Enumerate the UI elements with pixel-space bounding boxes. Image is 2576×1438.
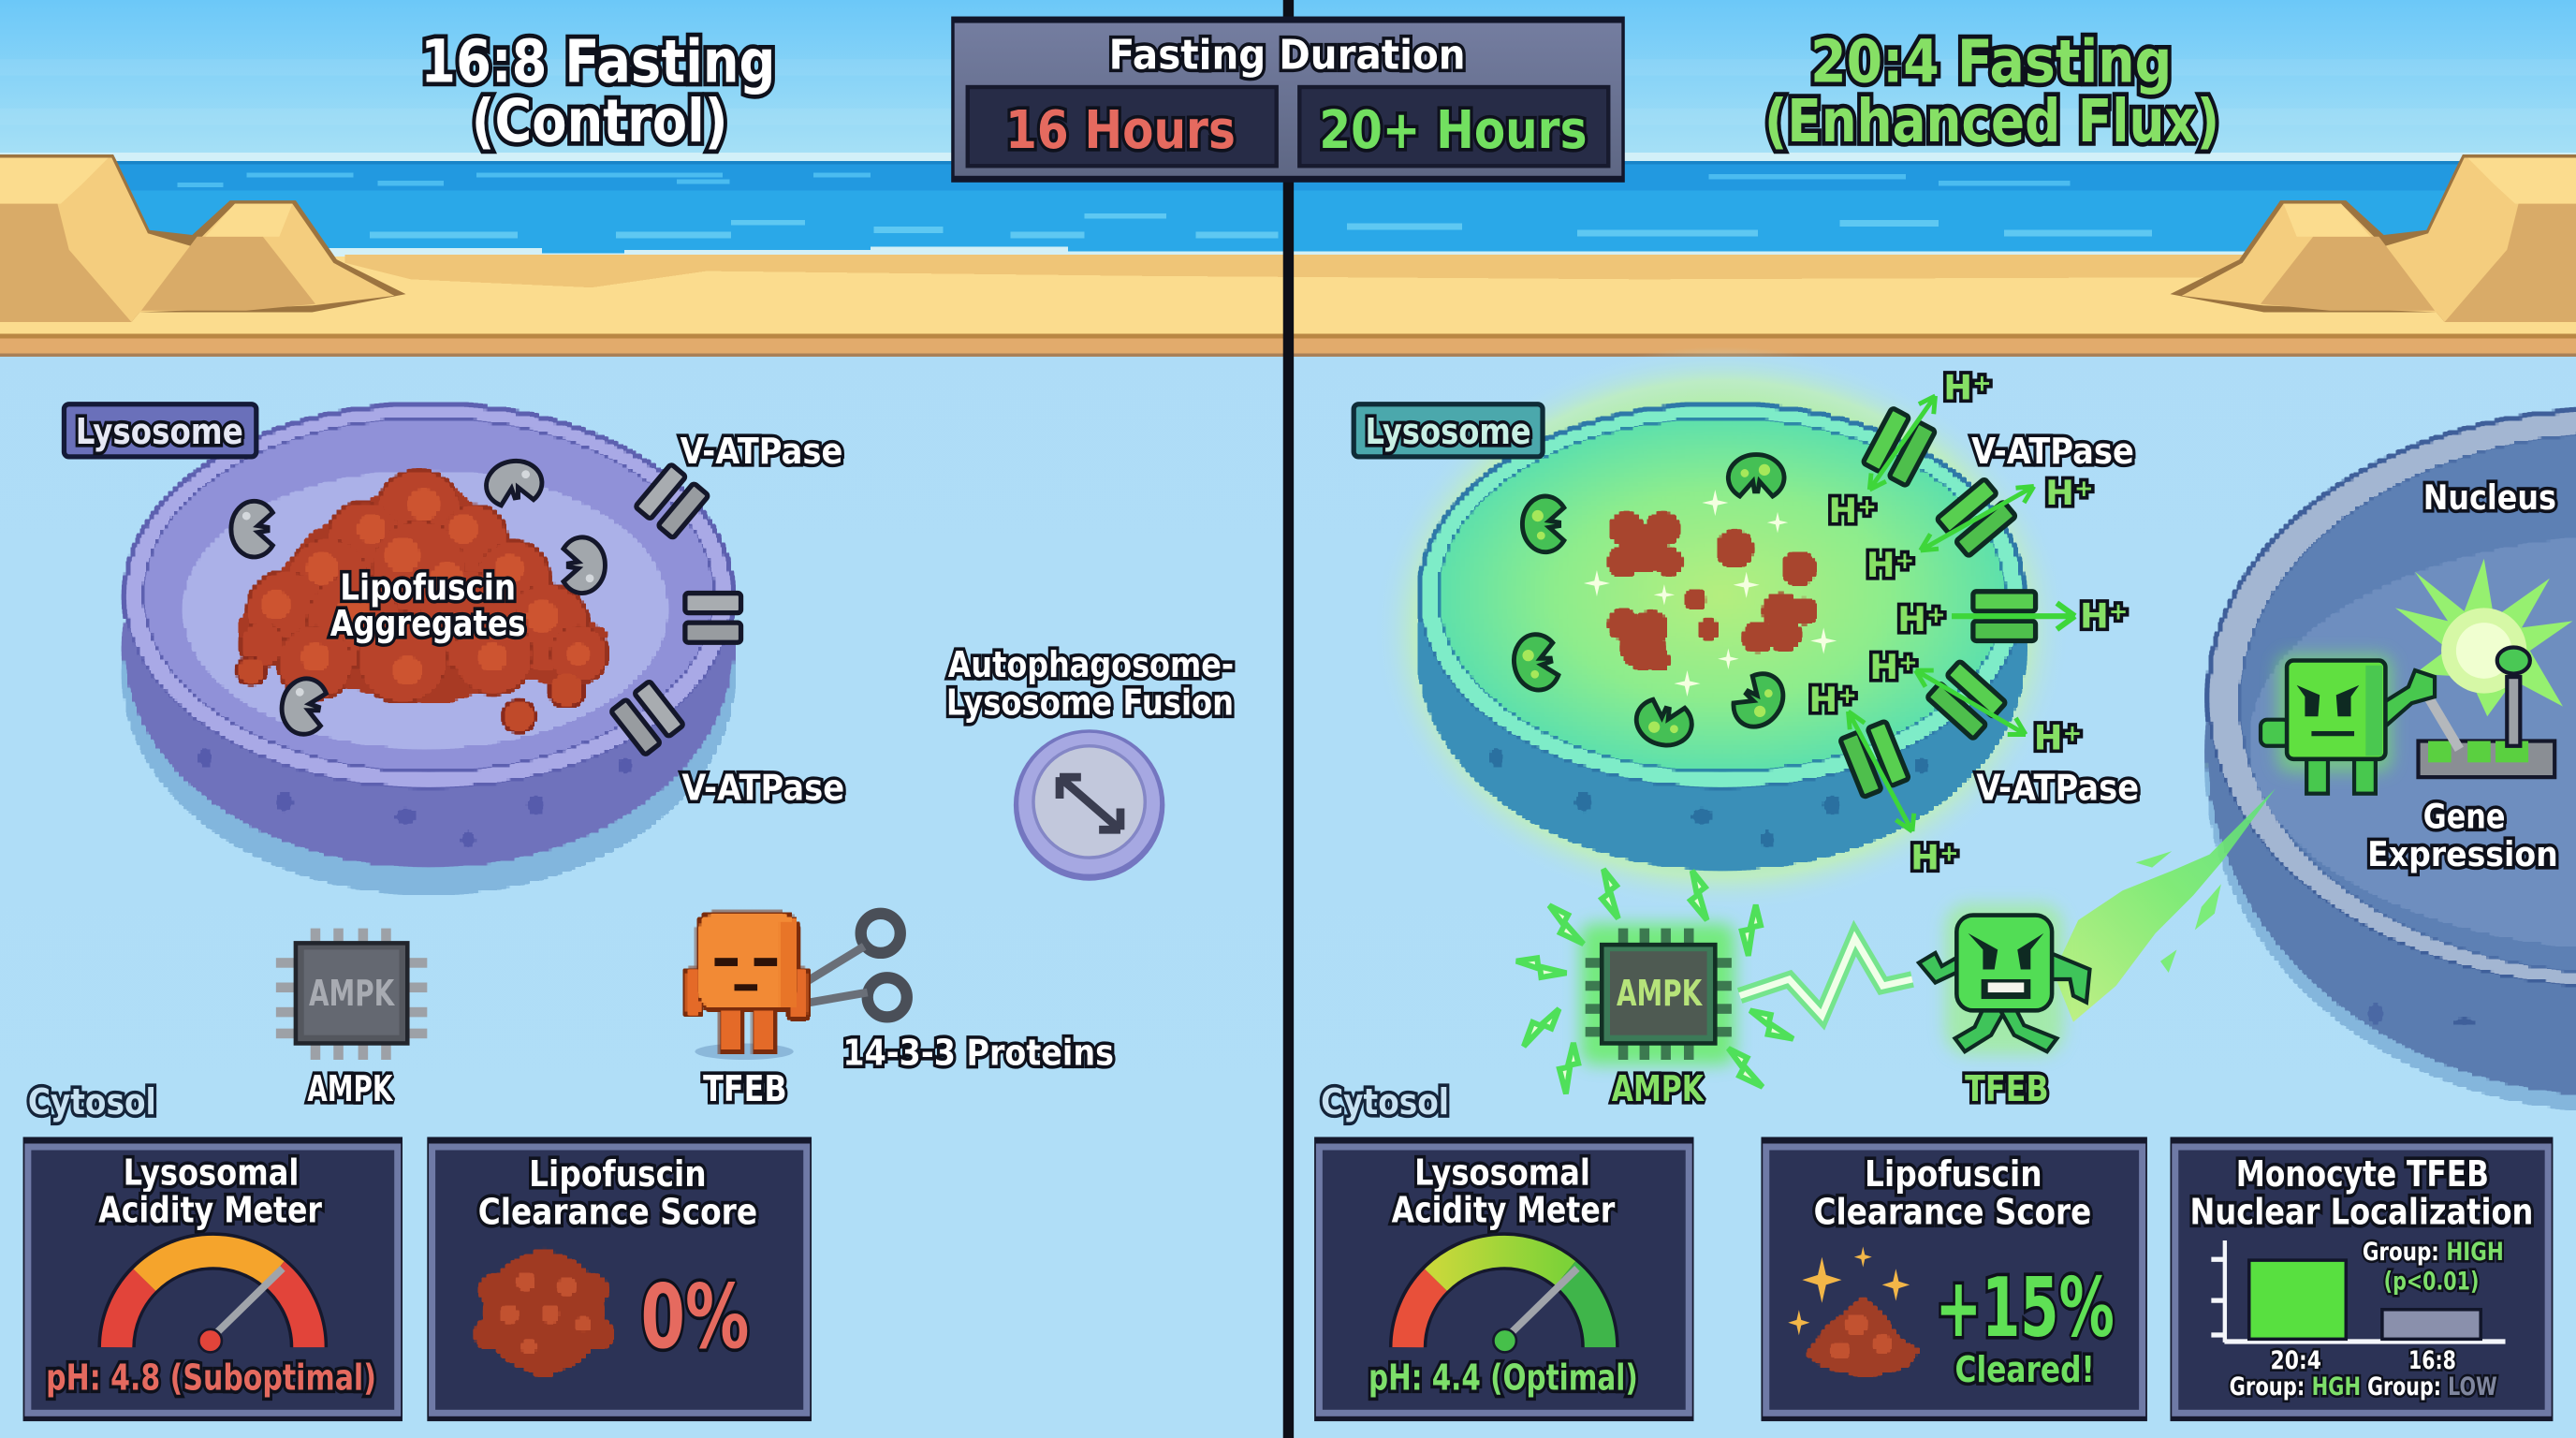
panel: monocyte TFEB [2170, 1137, 2553, 1421]
V-ATPase label top right: V-ATPase [1971, 431, 2134, 473]
gene expression label: Expression [2367, 834, 2558, 874]
axis labels: 16:8 [2408, 1347, 2456, 1375]
proton labels: H [1828, 491, 1857, 531]
green glow [1373, 346, 2070, 912]
heading [478, 1153, 757, 1233]
lever machine [2419, 647, 2554, 777]
V-ATPase label bottom right: V-ATPase [1976, 768, 2139, 810]
heading: Clearance Score [1814, 1191, 2091, 1233]
gauge [117, 1251, 309, 1352]
significance note [2363, 1239, 2504, 1297]
axis labels: 20:4 [2271, 1347, 2321, 1375]
lipofuscin label: Aggregates [330, 603, 526, 645]
nucleus [2206, 407, 2576, 1110]
V-ATPase label bottom: V-ATPase [681, 768, 844, 810]
proton labels: + [1898, 649, 1918, 676]
sparkles [1584, 490, 1837, 697]
V-ATPase label top: V-ATPase [681, 431, 842, 473]
cytosol label left: Cytosol [28, 1081, 156, 1123]
heading: Lipofuscin [529, 1153, 707, 1196]
gold sparkles [1788, 1247, 1910, 1335]
heading: Lysosomal [1414, 1152, 1590, 1194]
panel: clearance score right [1761, 1137, 2147, 1421]
cleared: Cleared! [1955, 1349, 2095, 1391]
axis labels: Group: HGH [2230, 1373, 2361, 1401]
title: 20:4 fasting: 20:4 Fasting [1810, 27, 2172, 96]
proton labels: + [1926, 601, 1946, 628]
axis labels [2230, 1347, 2497, 1401]
inactive enzymes [231, 457, 605, 737]
proton arrows [1848, 396, 2075, 831]
heading: Lysosomal [124, 1152, 299, 1194]
panel: clearance score left [427, 1137, 812, 1421]
icon: AMPK chip active [1515, 869, 1793, 1093]
title: 16:8 fasting: 16:8 Fasting [420, 27, 775, 96]
heading: Acidity Meter [1392, 1190, 1615, 1232]
TFEB in nucleus [2261, 654, 2435, 794]
proton labels: H [1866, 545, 1895, 585]
proton labels: + [1972, 370, 1992, 397]
score: 0% [640, 1266, 749, 1369]
panel: acidity meter left [23, 1137, 402, 1421]
proton labels: H [1943, 367, 1972, 407]
angry face [1969, 933, 2043, 999]
heading: Monocyte TFEB [2236, 1153, 2489, 1196]
proton labels: + [1939, 840, 1959, 867]
right cliffs [2170, 154, 2576, 322]
significance note: (p<0.01) [2384, 1269, 2479, 1297]
face [2297, 685, 2359, 736]
lysosome disk [124, 403, 735, 894]
lipofuscin label [330, 567, 526, 645]
fusion label [946, 644, 1234, 724]
gray V-ATPase pumps [610, 464, 741, 756]
TFEB body [685, 914, 809, 1051]
proton labels: + [2063, 720, 2082, 747]
proton labels: H [2045, 473, 2074, 513]
bar chart [2211, 1240, 2506, 1344]
14-3-3 label: 14-3-3 Proteins [842, 1032, 1114, 1074]
lipofuscin label: Lipofuscin [340, 567, 516, 609]
remaining lipofuscin pile [1808, 1298, 1919, 1377]
proton labels: + [2109, 598, 2128, 625]
score: +15% [1936, 1260, 2115, 1356]
left cliffs [0, 154, 406, 322]
TFEB inactive with scissors [685, 914, 907, 1060]
lysosome tag: enhanced: Lysosome [1365, 411, 1531, 453]
lipofuscin fragments [1608, 513, 1817, 670]
proton labels: + [1895, 547, 1914, 574]
proton labels [1808, 367, 2128, 877]
heading [1392, 1152, 1615, 1232]
centre divider [1283, 0, 1294, 1438]
box: 16 hours: 16 Hours [1005, 100, 1236, 161]
title: 16:8 fasting: (Control) [472, 86, 728, 155]
TFEB label active: TFEB [1965, 1068, 2049, 1110]
box: 20+ hours [1299, 87, 1608, 166]
green V-ATPase pumps [1840, 408, 2036, 798]
lysosome tag: enhanced [1354, 404, 1543, 457]
panel: fasting duration [951, 17, 1625, 183]
title: 16:8 fasting [420, 27, 775, 155]
significance note: Group: HIGH [2363, 1239, 2504, 1267]
heading: Acidity Meter [98, 1190, 322, 1232]
lysosome disk [1418, 403, 2026, 869]
lysosome tag: control: Lysosome [76, 411, 243, 453]
proton labels: H [1897, 599, 1926, 639]
title: 20:4 fasting [1764, 27, 2219, 155]
box: 20+ hours: 20+ Hours [1319, 100, 1587, 161]
proton labels: H [2080, 595, 2109, 636]
beach scene [0, 153, 2576, 357]
gauge [1408, 1251, 1600, 1352]
active enzymes [1510, 455, 1793, 751]
explosion burst [2395, 559, 2572, 716]
TFEB label: TFEB [703, 1068, 787, 1110]
pH readout: pH: 4.4 (Optimal) [1368, 1357, 1638, 1400]
title: 20:4 fasting: (Enhanced Flux) [1764, 86, 2219, 155]
heading [2190, 1153, 2533, 1233]
lysosome: enhanced [1373, 346, 2075, 912]
proton labels: + [1837, 682, 1857, 709]
box: 16 hours [968, 87, 1277, 166]
proton labels: H [1808, 680, 1837, 720]
proton labels: + [2074, 475, 2094, 502]
panel: acidity meter right [1314, 1137, 1694, 1421]
AMPK label active: AMPK [1612, 1068, 1705, 1110]
heading: Clearance Score [478, 1191, 757, 1233]
heading: Lipofuscin [1865, 1153, 2042, 1196]
gene expression label: Gene [2423, 797, 2506, 837]
lysosome tag: control [64, 404, 256, 457]
cytosol label right: Cytosol [1321, 1081, 1449, 1123]
nucleus label: Nucleus [2423, 477, 2556, 518]
AMPK label: AMPK [307, 1068, 394, 1110]
icon: fusion vesicle [1014, 729, 1164, 881]
proton labels: H [1869, 647, 1898, 687]
energy trail to nucleus [2054, 788, 2276, 1022]
sparks [1515, 869, 1793, 1093]
lipofuscin clump [475, 1249, 613, 1377]
icon: AMPK chip inactive [276, 929, 427, 1060]
axis labels: Group: LOW [2367, 1373, 2497, 1401]
heading [1814, 1153, 2091, 1233]
lysosome: control [124, 403, 741, 894]
heading: fasting duration: Fasting Duration [1109, 32, 1466, 80]
fusion label: Autophagosome- [948, 644, 1234, 686]
gene expression label [2367, 797, 2558, 874]
heading [98, 1152, 322, 1232]
icon: AMPK chip inactive: AMPK [309, 973, 396, 1015]
lipofuscin aggregates [238, 472, 607, 731]
proton labels: H [1910, 837, 1939, 877]
pH readout: pH: 4.8 (Suboptimal) [46, 1357, 376, 1400]
icon: AMPK chip active: AMPK [1617, 973, 1704, 1015]
scissors [792, 914, 907, 1017]
TFEB active [1919, 903, 2089, 1055]
arm and feet [2261, 670, 2435, 794]
lightning to TFEB [1740, 938, 1912, 1016]
proton labels: + [1857, 492, 1877, 520]
proton labels: H [2034, 717, 2063, 757]
fusion label: Lysosome Fusion [946, 682, 1234, 724]
